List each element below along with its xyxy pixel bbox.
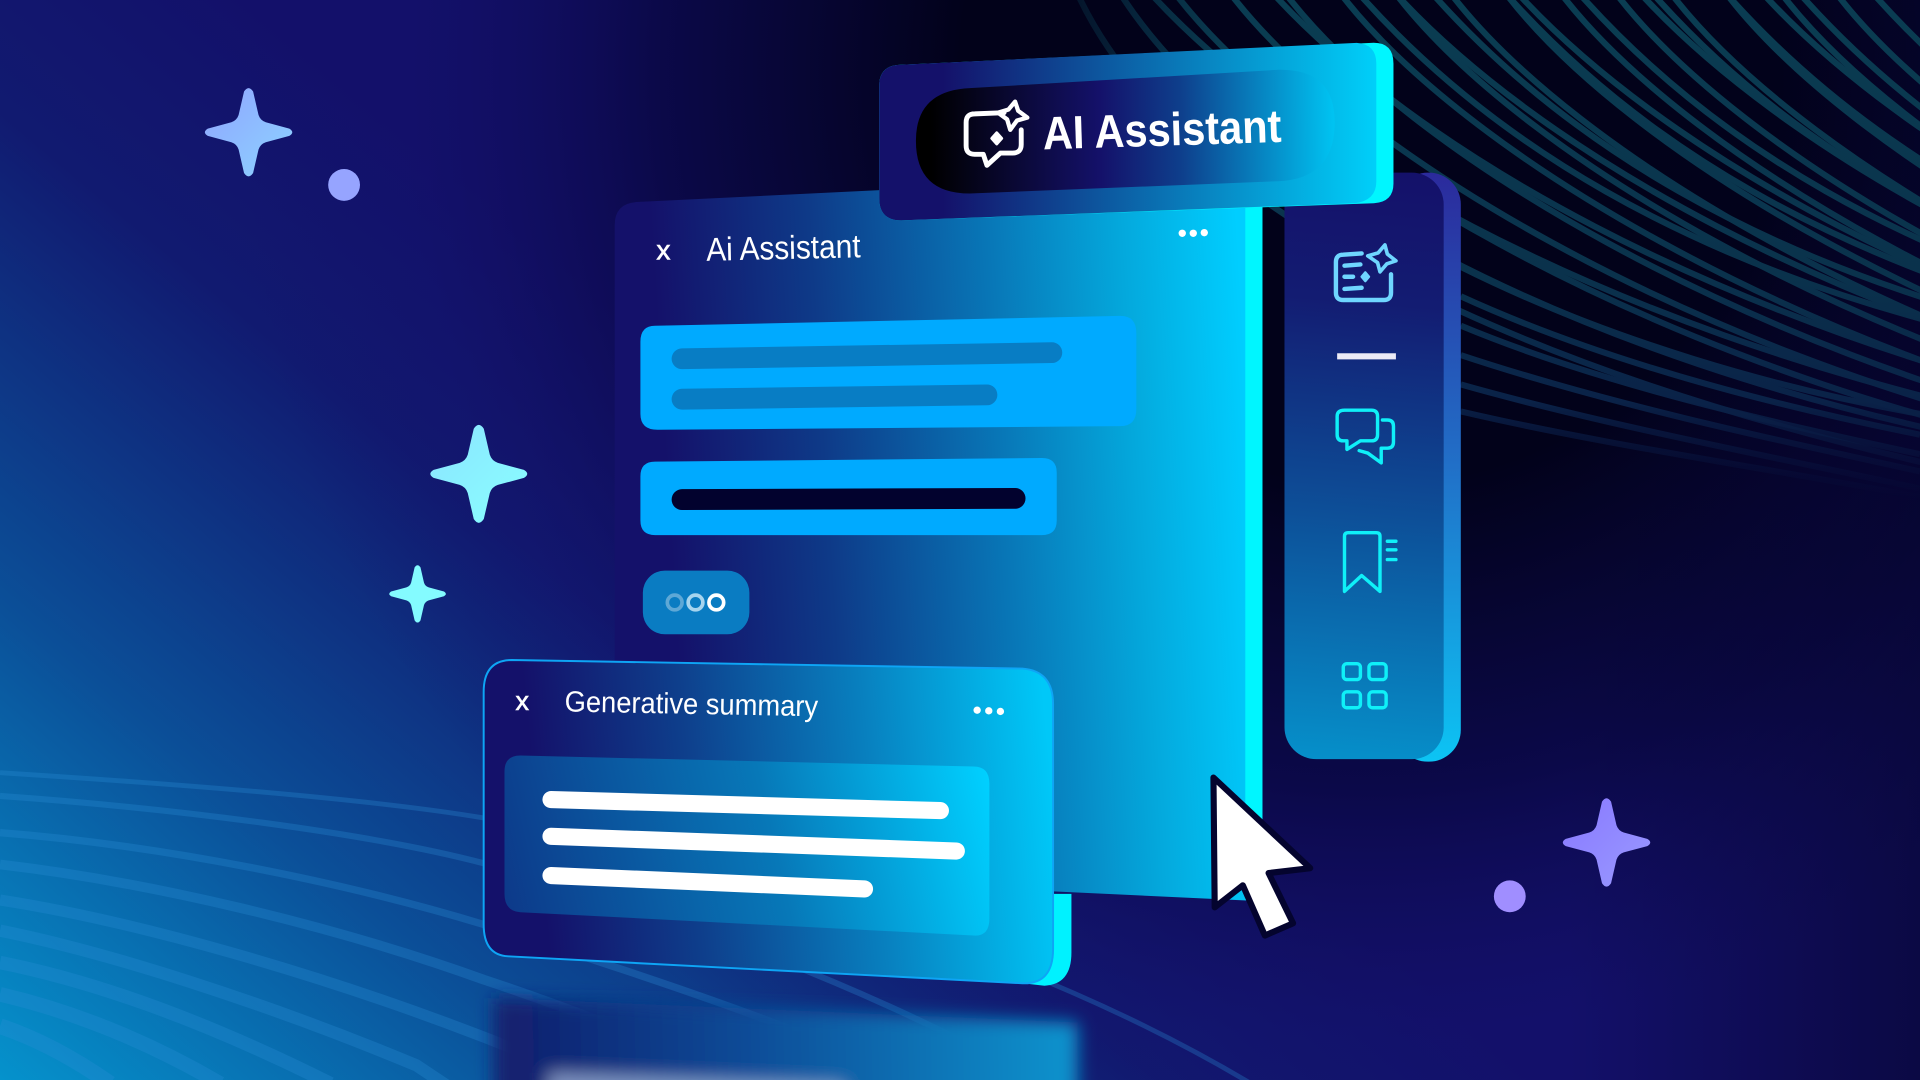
close icon: x [656, 235, 670, 266]
icon: bookmark with list [1344, 533, 1396, 591]
window title: Generative summary [564, 685, 819, 723]
sparkle: periwinkle star top left [205, 88, 292, 176]
sidebar side edge [1396, 173, 1461, 762]
panel: AI Assistant header card [879, 43, 1393, 220]
message card 2 [640, 458, 1057, 535]
card title: AI Assistant [1042, 100, 1282, 159]
sidebar front face [1284, 173, 1444, 759]
divider line [1337, 353, 1396, 359]
close icon: x [516, 686, 530, 716]
icon: app grid [1343, 664, 1386, 708]
window side edge [1245, 171, 1262, 901]
panel: icon sidebar [1284, 173, 1461, 762]
menu dots [973, 707, 1004, 715]
dot: purple [1494, 880, 1526, 912]
icon: document with sparkle [1336, 245, 1396, 300]
menu dots [1179, 229, 1208, 237]
title pill [916, 70, 1335, 193]
sparkle: purple star right [1563, 798, 1650, 887]
summary text block [504, 756, 989, 936]
window face [484, 660, 1053, 983]
typing indicator [643, 571, 749, 634]
message card 1 [640, 316, 1136, 430]
panel: generative summary window [484, 660, 1071, 986]
window face [615, 171, 1262, 901]
blurred card reflection [493, 998, 1078, 1080]
icon: mouse cursor [1213, 778, 1310, 936]
dot: periwinkle [328, 169, 360, 201]
panel: main AI assistant window [615, 171, 1262, 901]
icon: chat bubbles [1337, 410, 1393, 463]
window title: Ai Assistant [706, 228, 861, 269]
sparkle: small cyan star [389, 565, 446, 623]
card face [879, 43, 1393, 220]
sparkle: large cyan star [430, 425, 527, 523]
icon: chat with sparkle [966, 102, 1027, 165]
window side edge [1022, 894, 1071, 986]
